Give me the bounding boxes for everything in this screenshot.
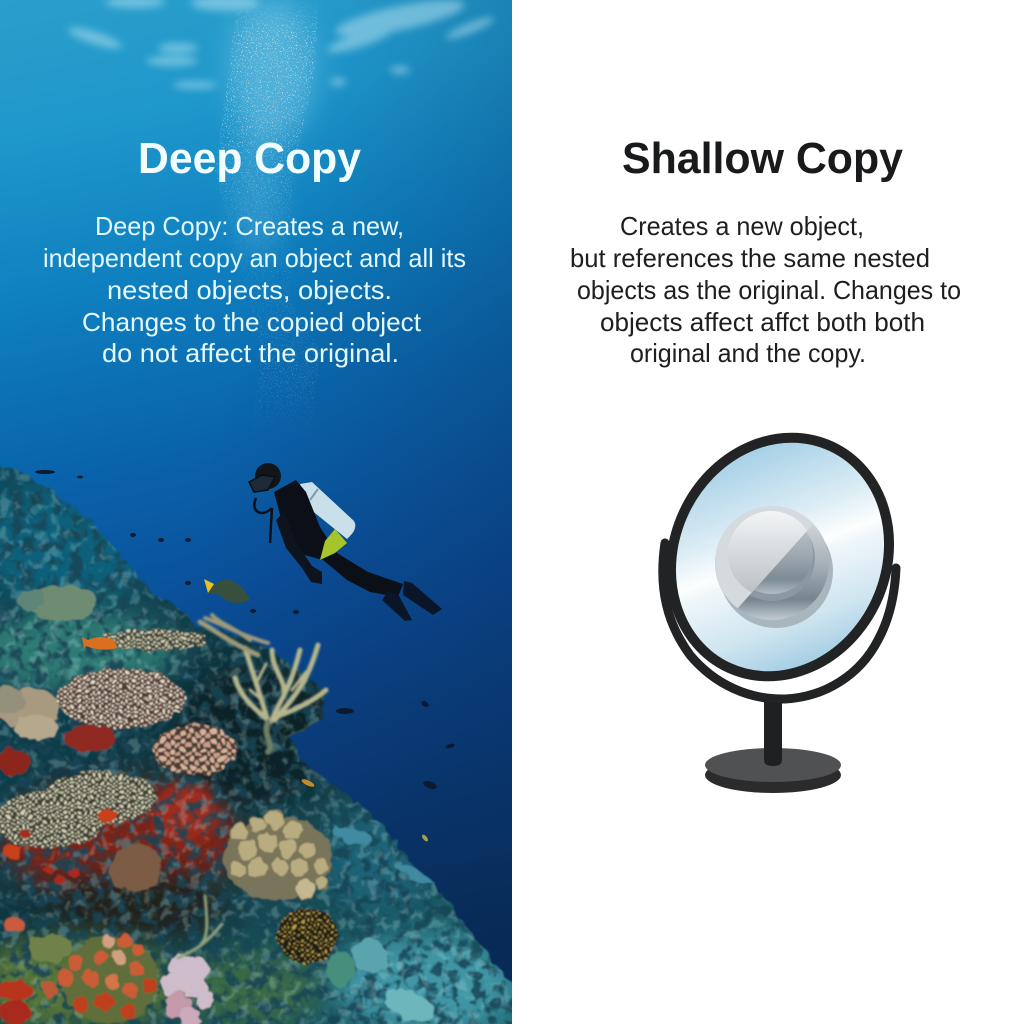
pink coral xyxy=(162,954,214,1024)
text: deep copy description: independent copy an object and all its xyxy=(43,243,466,273)
bubble column xyxy=(215,0,326,431)
orange and pink lumpy coral xyxy=(42,935,158,1024)
text: deep copy description: do not affect the original. xyxy=(102,338,399,368)
pale blue table corals on slope xyxy=(325,825,435,1022)
text: shallow copy description: objects affect affct both both xyxy=(600,307,925,337)
text: deep copy description xyxy=(43,211,466,368)
text: shallow copy description: but references the same nested xyxy=(570,243,930,273)
mirror glass xyxy=(667,432,894,682)
fins xyxy=(403,581,442,615)
heading: Shallow Copy: Shallow Copy xyxy=(622,134,904,183)
text: deep copy description: nested objects, objects. xyxy=(107,275,392,305)
head xyxy=(255,463,281,489)
mirror swivel arm xyxy=(663,543,896,699)
table coral middle xyxy=(57,668,185,728)
regulator hose xyxy=(254,498,272,543)
upper table coral xyxy=(103,629,207,651)
arm xyxy=(276,512,322,584)
mirror rim xyxy=(632,402,928,712)
reflected sphere xyxy=(715,506,833,628)
mask xyxy=(249,475,275,492)
icon: tabletop mirror xyxy=(658,432,900,793)
boulder coral centre xyxy=(224,810,332,900)
coral reef xyxy=(0,460,540,1024)
text: deep copy description: Deep Copy: Creates a new, xyxy=(95,211,404,241)
branching soft coral xyxy=(178,615,326,958)
fish: yellow tail xyxy=(204,579,250,603)
text: shallow copy description: objects as the original. Changes to xyxy=(577,275,961,305)
tan brain coral xyxy=(109,844,161,892)
red corals xyxy=(4,810,117,884)
text: deep copy description: Changes to the copied object xyxy=(82,307,422,337)
bottom left reds xyxy=(0,918,72,1024)
pink branching coral xyxy=(153,725,237,775)
surface light wisps xyxy=(67,0,496,89)
text: shallow copy description: Creates a new object, xyxy=(620,211,864,241)
air tank xyxy=(300,482,355,539)
small fish xyxy=(35,470,455,842)
heading: Deep Copy: Deep Copy xyxy=(138,134,362,183)
fish: orange xyxy=(82,637,118,650)
green pouch xyxy=(320,529,347,560)
text: shallow copy description: original and the copy. xyxy=(630,338,866,368)
boulder corals left xyxy=(0,585,116,776)
table coral lower xyxy=(0,772,156,848)
wetsuit body xyxy=(274,480,403,597)
panel: deep copy ocean scene xyxy=(0,0,540,1024)
scuba diver xyxy=(249,463,442,621)
mirror base xyxy=(705,748,841,793)
text: shallow copy description xyxy=(570,211,961,368)
dark dotted coral xyxy=(277,908,337,964)
mirror stem xyxy=(764,695,782,766)
